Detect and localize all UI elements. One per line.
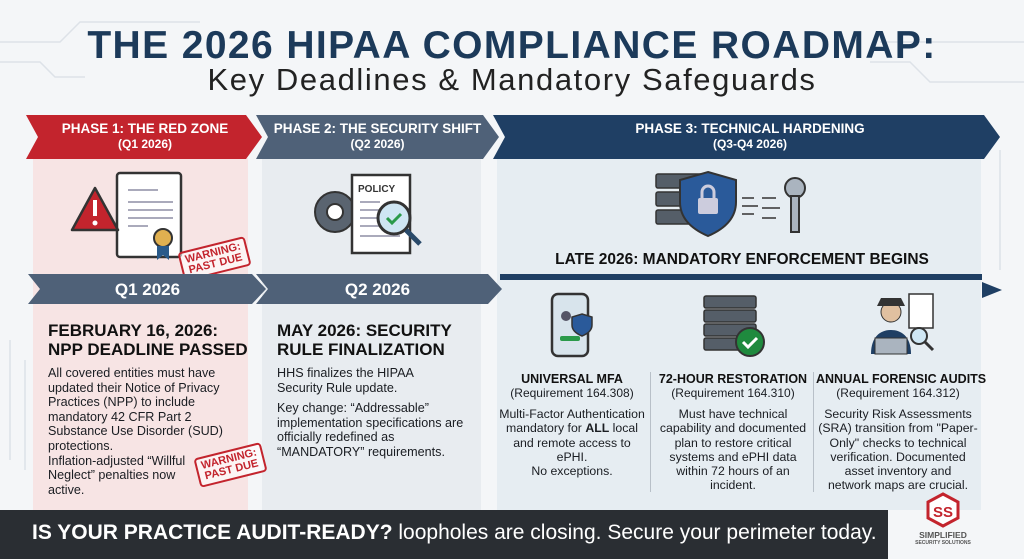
phase 2 label <box>274 121 482 151</box>
panel backgrounds <box>33 158 248 510</box>
panel 1 text: Neglect” penalties now <box>48 468 175 482</box>
panel 2 text: MAY 2026: SECURITY <box>277 321 452 340</box>
feature: annual forensic audits: network maps are crucial. <box>828 478 968 492</box>
title: THE 2026 HIPAA COMPLIANCE ROADMAP: <box>87 24 937 67</box>
feature: 72-hour restoration <box>659 295 807 492</box>
logo: SIMPLIFIED <box>919 530 967 540</box>
panel 1 text: All covered entities must have updated their Notice of Privacy Practices (NPP) to include mandatory 42 CFR Part 2 Substance Use Disorder (SUD) protections. <box>48 366 223 453</box>
feature: annual forensic audits: Security Risk Assessments <box>824 407 972 421</box>
panel 2 text: Key change: “Addressable” implementation specifications are officially redefined as “MANDATORY” requirements. <box>277 401 463 459</box>
icon: phone <box>550 292 593 358</box>
icon: gear and policy <box>314 174 422 254</box>
panel 1 text: NPP DEADLINE PASSED <box>48 340 248 359</box>
q bars and enforcement arrow <box>28 274 1002 304</box>
panel 2 text: Security Rule update. <box>277 381 397 395</box>
feature: universal MFA: mandatory for ALL local <box>506 421 638 435</box>
feature: 72-hour restoration: systems and ePHI data <box>669 450 797 464</box>
Q1 label: Q1 2026 <box>115 280 180 299</box>
feature: 72-hour restoration: capability and documented <box>660 421 806 435</box>
feature: annual forensic audits: ANNUAL FORENSIC AUDITS <box>816 372 986 386</box>
feature: 72-hour restoration: plan to restore critical <box>675 436 791 450</box>
phase 1 label: (Q1 2026) <box>118 137 172 151</box>
panel 2 text: HHS finalizes the HIPAA <box>277 366 414 380</box>
feature: universal MFA: No exceptions. <box>531 464 613 478</box>
Q2 label: Q2 2026 <box>345 280 410 299</box>
feature: annual forensic audits: verification. Documented <box>830 450 966 464</box>
feature: annual forensic audits: asset inventory and <box>845 464 951 478</box>
feature: annual forensic audits: (Requirement 164.312) <box>836 386 960 400</box>
feature: annual forensic audits: (SRA) transition from "Paper- <box>818 421 978 435</box>
phase 2 label: PHASE 2: THE SECURITY SHIFT <box>274 121 481 136</box>
panel 1 text: active. <box>48 483 84 497</box>
stamp: warning past due top: PAST DUE <box>188 251 244 276</box>
panel 1 text: Inflation-adjusted “Willful <box>48 454 185 468</box>
stamp: warning past due bottom <box>193 442 267 488</box>
feature: universal MFA <box>499 292 645 478</box>
feature: universal MFA: UNIVERSAL MFA <box>521 372 623 386</box>
phase 3 label: (Q3-Q4 2026) <box>713 137 787 151</box>
panel 2 text <box>277 321 463 459</box>
icon: warning and certificate <box>70 172 182 260</box>
bottom banner: IS YOUR PRACTICE AUDIT-READY? loopholes are closing. Secure your perimeter today. <box>32 521 877 544</box>
feature: 72-hour restoration: 72-HOUR RESTORATION <box>659 372 807 386</box>
stamp: warning past due bottom: WARNING: <box>200 446 258 472</box>
feature: 72-hour restoration: within 72 hours of an <box>676 464 790 478</box>
late 2026 heading: LATE 2026: MANDATORY ENFORCEMENT BEGINS <box>555 251 929 268</box>
feature: 72-hour restoration: Must have technical <box>679 407 787 421</box>
feature: universal MFA: Multi-Factor Authentication <box>499 407 645 421</box>
feature: 72-hour restoration: (Requirement 164.310) <box>671 386 795 400</box>
bottom banner <box>0 510 888 559</box>
logo: SECURITY SOLUTIONS <box>915 540 971 546</box>
icon: gear and policy: POLICY <box>358 184 396 195</box>
stamp: warning past due top <box>177 236 251 282</box>
feature: universal MFA: and remote access to <box>513 436 631 450</box>
panel 2 text: RULE FINALIZATION <box>277 340 445 359</box>
panel 1 text: FEBRUARY 16, 2026: <box>48 321 218 340</box>
feature: annual forensic audits <box>816 293 986 492</box>
phase 1 label <box>62 121 228 151</box>
icon: server shield key <box>655 171 806 238</box>
feature: 72-hour restoration: incident. <box>710 478 756 492</box>
feature: annual forensic audits: Only" checks to technical <box>830 436 966 450</box>
phase 1 label: PHASE 1: THE RED ZONE <box>62 121 228 136</box>
logo <box>915 492 971 546</box>
icon: auditor <box>871 293 934 354</box>
panel 1 text <box>48 321 248 497</box>
phase banners <box>26 115 1000 159</box>
icon: server check <box>703 295 765 357</box>
feature: universal MFA: ePHI. <box>557 450 587 464</box>
feature: universal MFA: (Requirement 164.308) <box>510 386 634 400</box>
phase 2 label: (Q2 2026) <box>350 137 405 151</box>
subtitle: Key Deadlines & Mandatory Safeguards <box>207 62 817 97</box>
phase 3 label <box>635 121 865 151</box>
dividers <box>650 372 651 492</box>
stamp: warning past due top: WARNING: <box>184 240 242 266</box>
stamp: warning past due bottom: PAST DUE <box>204 457 260 482</box>
phase 3 label: PHASE 3: TECHNICAL HARDENING <box>635 121 865 136</box>
logo: SS <box>933 504 953 521</box>
